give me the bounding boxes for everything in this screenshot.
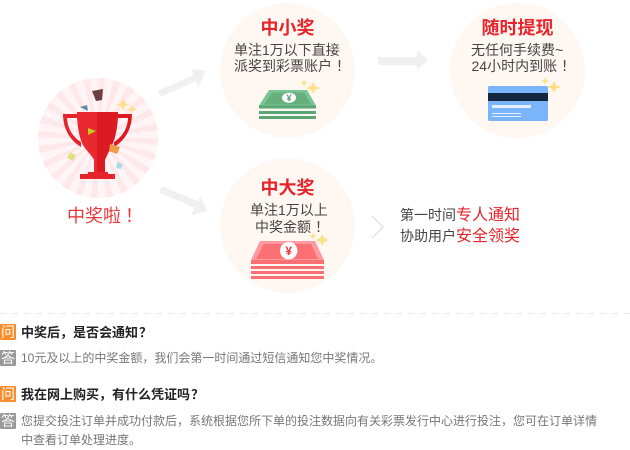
text: notification note: 协助用户安全领奖: [400, 227, 520, 245]
text: small prize description: 派奖到彩票账户 ！: [234, 58, 350, 74]
icon: green cash stack: ¥: [286, 93, 292, 103]
text: answer 1: 10元及以上的中奖金额，我们会第一时间通过短信通知您中奖情况。: [21, 350, 382, 365]
heading: large prize: 中大奖: [260, 178, 314, 198]
panel: small prize: [220, 3, 355, 138]
icon: trophy: [63, 112, 132, 179]
arrow: to withdrawal: [378, 50, 428, 70]
text: large prize description: 单注1万以上: [250, 202, 328, 218]
text: answer 2: 您提交投注订单并成功付款后，系统根据您所下单的投注数据向有关彩票发行中心进行投注，您可在订单详情: [21, 413, 597, 428]
panel: large prize: [220, 158, 355, 293]
icon: answer 2: 答: [1, 413, 15, 429]
text: large prize description: 中奖金额 ！: [255, 219, 329, 235]
text: question 1: 中奖后，是否会通知？: [21, 325, 152, 340]
text: answer 2: 中查看订单处理进度。: [21, 432, 141, 447]
sunburst circle: [38, 78, 158, 198]
heading: winner: 中奖啦！: [67, 206, 143, 226]
icon: confetti: [67, 89, 136, 169]
icon: red cash stack: ¥: [285, 244, 292, 258]
icon: question 1: 问: [1, 324, 15, 340]
icon: chevron: [372, 216, 383, 238]
text: notification note: 第一时间专人通知: [400, 206, 520, 224]
text: notification note: [400, 206, 520, 245]
icon: answer 1: 答: [1, 350, 15, 366]
heading: withdraw anytime: 随时提现: [482, 17, 554, 38]
panel: FAQ: [0, 324, 597, 447]
arrow: to large prize: [159, 186, 208, 215]
text: withdrawal description: 无任何手续费~: [471, 42, 563, 58]
panel: withdraw anytime: [450, 3, 585, 138]
panel: trophy badge: [38, 78, 158, 198]
text: withdrawal description: 24小时内到账 ！: [472, 58, 575, 74]
arrow: to small prize: [158, 69, 206, 97]
icon: bank card: [488, 77, 561, 121]
heading: small prize: 中小奖: [260, 18, 314, 38]
text: question 2: 我在网上购买，有什么凭证吗？: [21, 387, 204, 402]
text: small prize description: 单注1万以下直接: [234, 42, 340, 58]
icon: question 2: 问: [1, 386, 15, 402]
